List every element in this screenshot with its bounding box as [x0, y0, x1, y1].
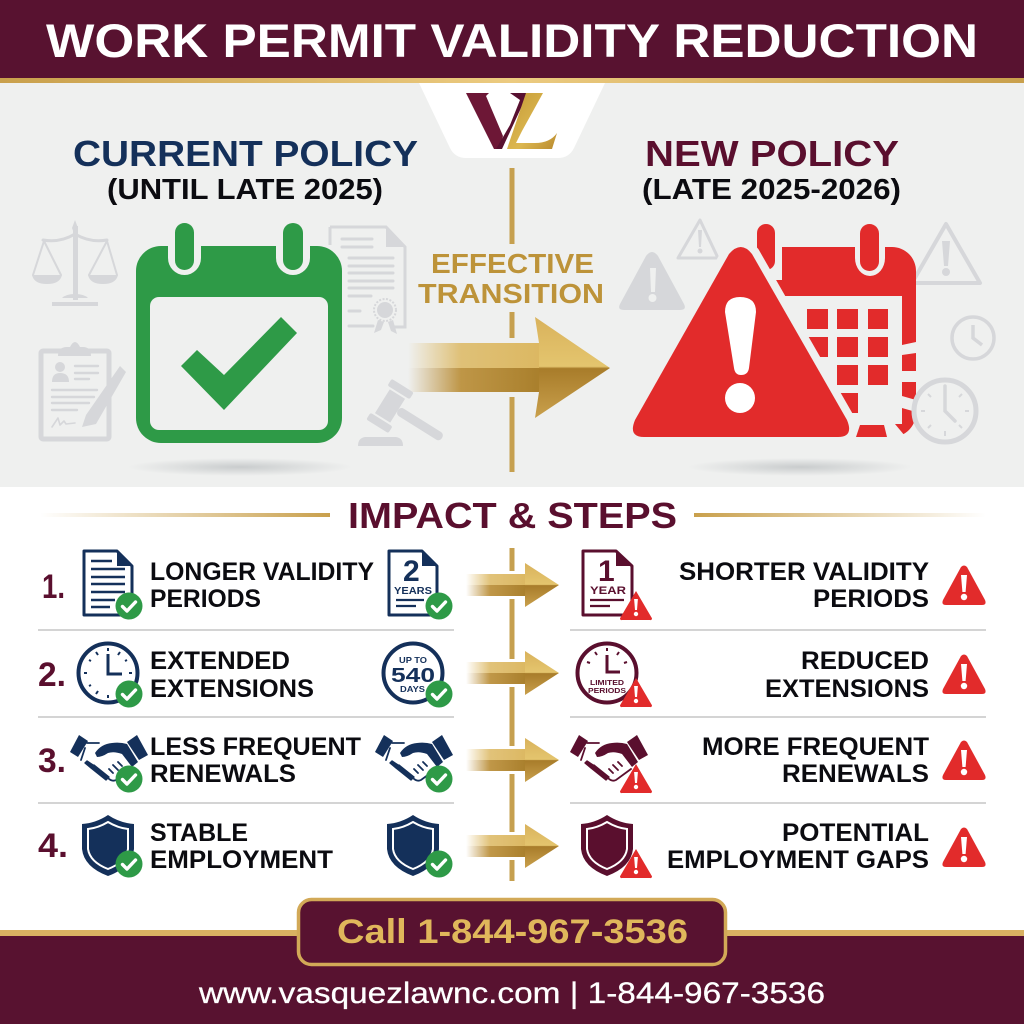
- icon: clock with check: [78, 644, 142, 708]
- call button: Call 1-844-967-3536: [337, 913, 688, 951]
- icon: warning: [942, 654, 986, 694]
- arrow: [466, 824, 559, 868]
- text: longer validity periods: LONGER VALIDITY: [150, 558, 374, 586]
- text: more frequent renewals: RENEWALS: [782, 760, 929, 788]
- icon: 2 years document: 2: [403, 555, 420, 588]
- icon: limited periods clock: PERIODS: [588, 686, 626, 695]
- text: potential employment gaps: POTENTIAL: [782, 819, 929, 847]
- icon: 1 year document with warning: YEAR: [590, 585, 626, 597]
- footer band: [0, 930, 1024, 1024]
- text: potential employment gaps: [667, 819, 929, 874]
- icon: shield with warning: [581, 815, 652, 878]
- row 2: [38, 644, 986, 708]
- icon: up to 540 days: DAYS: [400, 685, 426, 694]
- icon: handshake with check: [375, 735, 453, 792]
- heading: current policy: (UNTIL LATE 2025): [107, 174, 383, 206]
- row 1: [42, 551, 986, 620]
- icon: clipboard: [41, 342, 126, 439]
- text: reduced extensions: EXTENSIONS: [765, 675, 929, 703]
- text: less frequent renewals: [150, 733, 361, 788]
- number 3: 3.: [38, 742, 66, 780]
- heading: new policy: (LATE 2025-2026): [642, 174, 901, 206]
- calendar shadow: [128, 458, 352, 476]
- arrow: [466, 738, 559, 782]
- text: shorter validity periods: PERIODS: [813, 585, 929, 613]
- icon: shield with check: [387, 815, 452, 878]
- text: longer validity periods: PERIODS: [150, 585, 261, 613]
- icon: up to 540 days: [384, 644, 452, 708]
- warning shadow: [688, 458, 912, 476]
- icon: limited periods clock: LIMITED: [590, 678, 625, 687]
- text: shorter validity periods: [679, 558, 929, 613]
- text: less frequent renewals: LESS FREQUENT: [150, 733, 361, 761]
- grey clock icons: [914, 317, 994, 442]
- text: extended extensions: EXTENDED: [150, 647, 290, 675]
- arrow: [466, 563, 559, 607]
- icon: 1 year document with warning: 1: [598, 555, 615, 588]
- row 3: [38, 733, 986, 793]
- icon: handshake with check: [70, 735, 148, 792]
- row 4: [38, 815, 986, 878]
- text: extended extensions: EXTENSIONS: [150, 675, 314, 703]
- icon: limited periods clock: [578, 644, 652, 707]
- center divider: [510, 168, 514, 472]
- text: stable employment: STABLE: [150, 819, 248, 847]
- icon: warning: [942, 740, 986, 780]
- header band: [0, 0, 1024, 83]
- icon: up to 540 days: 540: [391, 665, 435, 687]
- center divider: rows: [510, 548, 514, 881]
- logo: [419, 83, 605, 158]
- heading: new policy: [642, 133, 901, 206]
- grey warning icons: [619, 220, 980, 310]
- icon: gavel: [358, 379, 454, 459]
- panel: policy comparison: [0, 83, 1024, 487]
- icon: handshake with warning: [570, 735, 652, 793]
- section heading: impact and steps: IMPACT & STEPS: [348, 495, 677, 536]
- number 1: 1.: [42, 568, 65, 606]
- icon: red calendar behind warning: [745, 224, 916, 440]
- text: stable employment: [150, 819, 333, 874]
- heading: current policy: [73, 133, 418, 206]
- text: potential employment gaps: EMPLOYMENT GAPS: [667, 846, 929, 874]
- icon: 1 year document with warning: [583, 551, 652, 620]
- icon: warning: [942, 566, 986, 605]
- text: more frequent renewals: [702, 733, 929, 788]
- text: stable employment: EMPLOYMENT: [150, 846, 333, 874]
- icon: 2 years document: [389, 551, 452, 620]
- label: effective transition: TRANSITION: [418, 278, 604, 309]
- number 4: 4.: [38, 827, 68, 865]
- heading: new policy: NEW POLICY: [645, 133, 899, 174]
- text: more frequent renewals: MORE FREQUENT: [702, 733, 929, 761]
- text: reduced extensions: [765, 647, 929, 703]
- footer contact text: www.vasquezlawnc.com | 1-844-967-3536: [198, 977, 825, 1010]
- icon: green calendar with check: [136, 223, 342, 443]
- heading: current policy: CURRENT POLICY: [73, 133, 418, 174]
- text: longer validity periods: [150, 558, 374, 613]
- text: shorter validity periods: SHORTER VALIDITY: [679, 558, 929, 586]
- row dividers: [38, 629, 986, 804]
- icon: shield with check: [82, 815, 142, 878]
- label: effective transition: [418, 248, 604, 309]
- section heading: impact and steps: [40, 495, 986, 536]
- icon: 2 years document: YEARS: [394, 585, 432, 597]
- text: extended extensions: [150, 647, 314, 703]
- arrow: transition: [408, 317, 610, 418]
- number 2: 2.: [38, 656, 66, 694]
- text: reduced extensions: REDUCED: [801, 647, 929, 675]
- text: less frequent renewals: RENEWALS: [150, 760, 296, 788]
- arrow: [466, 651, 559, 695]
- title: WORK PERMIT VALIDITY REDUCTION: [46, 14, 978, 67]
- label: effective transition: EFFECTIVE: [431, 248, 594, 279]
- icon: red warning triangle: [633, 247, 849, 437]
- icon: document with check: [84, 551, 142, 620]
- icon: certificate: [330, 227, 405, 334]
- call button: [298, 900, 726, 964]
- icon: scales: [32, 220, 118, 306]
- icon: warning: [942, 828, 986, 867]
- icon: up to 540 days: UP TO: [399, 655, 427, 665]
